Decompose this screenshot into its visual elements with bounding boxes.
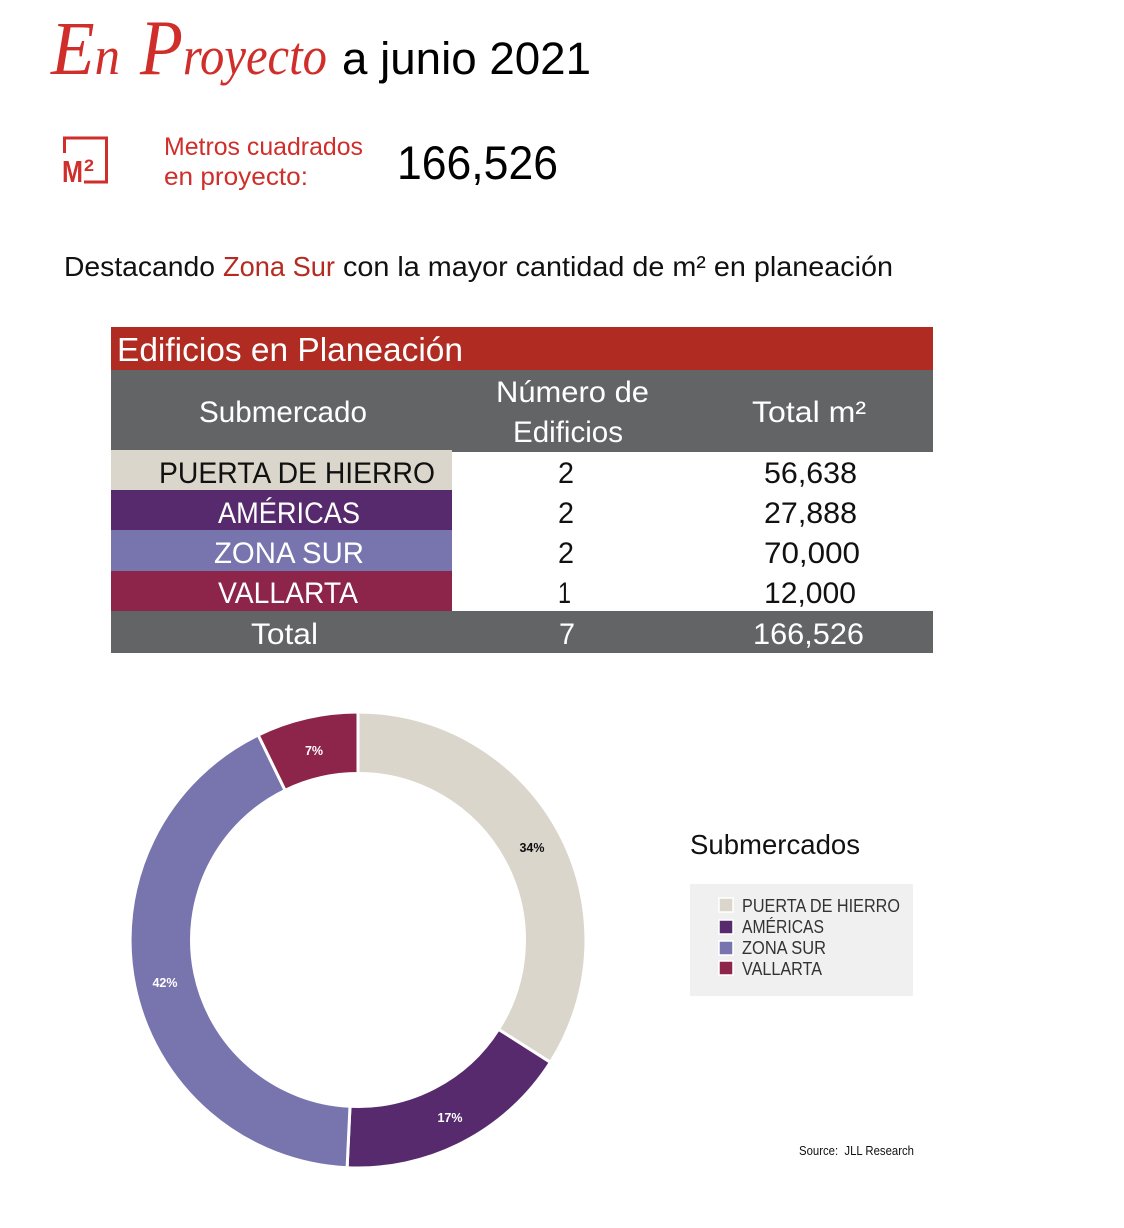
- percentage labels: 34%: [519, 841, 545, 855]
- metric value: 166,526: [397, 136, 558, 189]
- title: En: [50, 7, 120, 91]
- row: vallarta: 1: [558, 577, 571, 610]
- table header: Submercado: [199, 396, 367, 429]
- table title bar: Edificios en Planeación: [117, 331, 463, 368]
- legend: PUERTA DE HIERRO: [742, 896, 900, 916]
- row: vallarta: 12,000: [764, 577, 856, 610]
- table header: Número de: [496, 376, 649, 409]
- percentage labels: 42%: [152, 976, 178, 990]
- percentage labels: 7%: [305, 744, 323, 758]
- legend: ZONA SUR: [742, 938, 826, 958]
- row: zona sur: ZONA SUR: [214, 537, 364, 570]
- row: total: 166,526: [753, 618, 864, 651]
- segment: américas 17%: [347, 1029, 550, 1168]
- row: puerta de hierro: 2: [558, 457, 574, 490]
- highlight sentence: Zona Sur: [223, 251, 335, 282]
- table header: Total m²: [752, 396, 866, 429]
- row: total: 7: [559, 618, 575, 651]
- highlight sentence: [64, 251, 893, 282]
- row: puerta de hierro: 56,638: [764, 457, 857, 490]
- icon: m2 square: M: [62, 154, 83, 189]
- percentage labels: [152, 744, 545, 1125]
- donut chart: [130, 712, 586, 1168]
- row: zona sur: 2: [558, 537, 574, 570]
- title: a junio 2021: [342, 33, 591, 84]
- metric label: Metros cuadrados: [164, 133, 363, 161]
- table header: [111, 370, 933, 452]
- row: vallarta: [111, 571, 856, 611]
- table title bar: [111, 327, 933, 370]
- row: américas: 27,888: [764, 497, 857, 530]
- source note: Source: JLL Research: [799, 1143, 914, 1158]
- title: [50, 4, 591, 91]
- row: puerta de hierro: [111, 450, 857, 490]
- row: américas: 2: [558, 497, 574, 530]
- percentage labels: 17%: [437, 1111, 463, 1125]
- icon: m2 square: [62, 138, 106, 189]
- table header: Edificios: [513, 416, 623, 449]
- row: zona sur: [111, 530, 860, 571]
- row: vallarta: VALLARTA: [218, 577, 358, 610]
- segment: vallarta 7%: [258, 712, 358, 790]
- segment: zona sur 42%: [130, 735, 350, 1168]
- row: total: [111, 611, 933, 653]
- title: Proyecto: [139, 4, 327, 91]
- row: américas: [111, 490, 857, 530]
- row: zona sur: 70,000: [764, 537, 860, 570]
- highlight sentence: Destacando: [64, 251, 215, 282]
- row: total: Total: [251, 618, 318, 651]
- segment: puerta de hierro 34%: [358, 712, 586, 1062]
- legend: VALLARTA: [742, 959, 822, 979]
- legend: [690, 884, 913, 996]
- legend title: Submercados: [690, 829, 860, 860]
- legend: AMÉRICAS: [742, 917, 824, 937]
- icon: m2 square: 2: [84, 156, 94, 175]
- metric label: [164, 133, 363, 191]
- row: puerta de hierro: PUERTA DE HIERRO: [159, 457, 435, 490]
- row: américas: AMÉRICAS: [218, 497, 360, 530]
- highlight sentence: con la mayor cantidad de m² en planeación: [343, 251, 893, 282]
- table: edificios en planeación: [111, 327, 933, 653]
- metric label: en proyecto:: [164, 163, 308, 191]
